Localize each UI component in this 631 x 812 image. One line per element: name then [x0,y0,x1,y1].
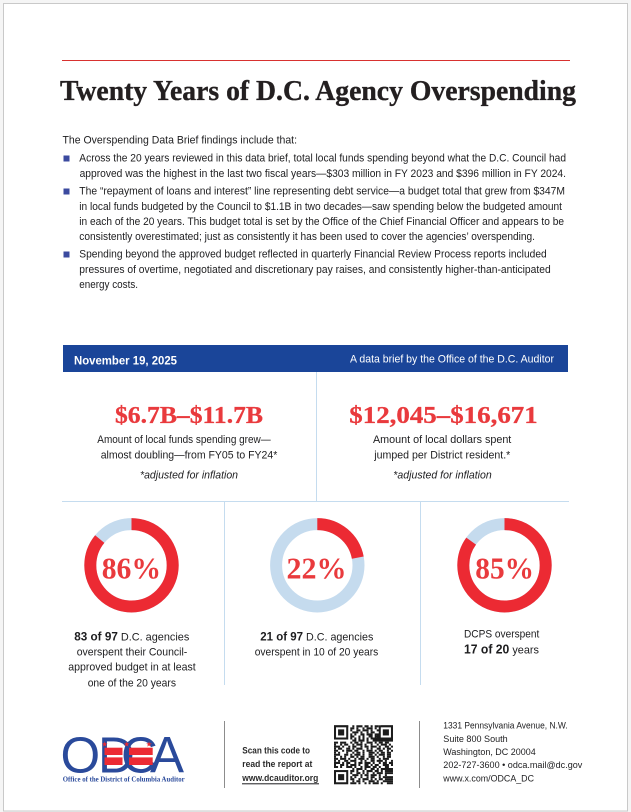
panel: local funds spending: almost doubling—from FY05 to FY24* [101,450,278,462]
logo wordmark: ODCA [60,726,184,784]
panel: 86 percent [68,524,197,690]
finding 1: approved was the highest in the last two fiscal years—$303 million in FY 2023 and $396 million in FY 2024. [80,168,566,180]
header rule [62,60,570,61]
finding 3: Spending beyond the approved budget reflected in quarterly Financial Review Process reports included [79,248,547,260]
banner source: A data brief by the Office of the D.C. Auditor [350,354,554,366]
contact details: 1331 Pennsylvania Avenue, N.W. [443,721,568,732]
panel: 85 percent: 17 of 20 years [464,643,539,657]
donut chart 22%: 22% [286,550,346,585]
scan text: Scan this code to [242,745,310,756]
contact details: Washington, DC 20004 [443,747,536,758]
title: Twenty Years of D.C. Agency Overspending [60,76,576,107]
note: *adjusted for inflation [393,470,492,482]
stat panel grid lines [62,372,569,685]
scan text: read the report at [242,759,313,770]
finding 3: energy costs. [79,279,138,291]
QR code [334,725,393,784]
logo: ODCA [60,726,185,784]
donut chart 86%: 86% [102,550,161,585]
findings text block [62,134,566,291]
description: Amount of local funds spending grew— [97,434,271,446]
date banner [63,345,568,372]
note: *adjusted for inflation [140,470,238,482]
caption: DCPS overspent [464,629,540,641]
scan text: www.dcauditor.org [241,773,318,784]
contact details: Suite 800 South [443,734,508,745]
icon: DC flag [102,741,153,765]
finding 3 [64,248,551,291]
panel: dollars per resident: jumped per District resident.* [373,450,511,462]
donut chart 86% [90,524,173,606]
banner date: November 19, 2025 [74,356,178,368]
donut chart 85%: 85% [475,550,534,585]
big number: $12,045–$16,671 [349,403,538,429]
big number: $6.7B–$11.7B [115,403,263,429]
description: Amount of local dollars spent [373,434,512,446]
contact details [442,721,582,784]
caption: 21 of 97 D.C. agencies [260,629,374,643]
QR finder patterns [334,725,393,784]
finding 1 [64,152,566,180]
finding 2: The “repayment of loans and interest” line representing debt service—a budget total that grew from $347M [79,186,565,198]
logo tagline: Office of the District of Columbia Auditor [63,776,185,784]
contact details: www.x.com/ODCA_DC [442,773,534,784]
panel: 86 percent: overspent their Council- [77,646,188,658]
finding 3: pressures of overtime, negotiated and discretionary pay raises, and consistently higher-than-anticipated [79,264,551,276]
caption: 83 of 97 D.C. agencies [74,629,190,643]
finding 2 [64,186,565,243]
finding 2: in local funds budgeted by the Council to $1.1B in two decades—saw spending below the budgeted amount [79,201,562,213]
panel: 22 percent: overspent in 10 of 20 years [255,646,379,658]
contact details: 202-727-3600 • odca.mail@dc.gov [443,760,582,771]
scan text [241,745,319,784]
finding 1: Across the 20 years reviewed in this data brief, total local funds spending beyond what the D.C. Council had [79,152,566,164]
finding 2: in each of the 20 years. This budget total is set by the Office of the Chief Financial Officer and appears to be [79,216,564,228]
panel: 22 percent [255,524,379,658]
panel: dollars per resident [349,403,538,482]
panel: local funds spending [97,403,278,482]
panel: 86 percent: one of the 20 years [88,678,176,690]
intro line: The Overspending Data Brief findings include that: [62,134,297,146]
finding 2: consistently overestimated; just as consistently it has been used to cover the agencies’ overspending. [79,231,535,243]
footer dividers [224,721,420,788]
panel: 86 percent: approved budget in at least [68,661,197,673]
panel: 85 percent [463,524,546,657]
